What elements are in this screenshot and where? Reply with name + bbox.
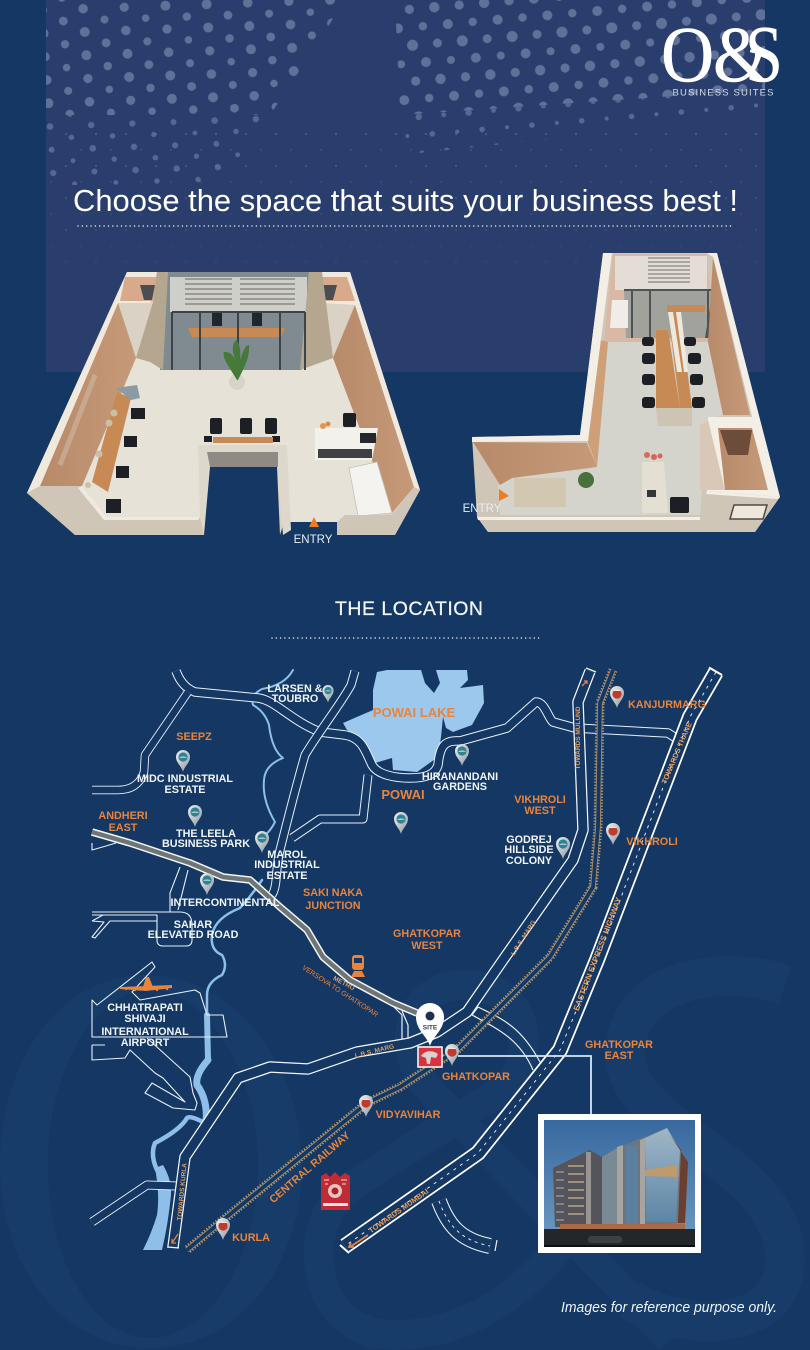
place labels: TOUBRO xyxy=(272,693,318,705)
road labels: VERSOVA TO GHATKOPAR xyxy=(300,965,379,1019)
place labels: COLONY xyxy=(506,855,553,867)
Powai lake xyxy=(343,670,484,772)
wood walls xyxy=(588,340,608,467)
place labels: SAKI NAKA xyxy=(303,887,363,899)
thin-line side roads xyxy=(92,843,227,1110)
outer shell xyxy=(472,253,780,532)
place labels: SAHAR xyxy=(174,919,212,931)
place labels: BUSINESS PARK xyxy=(162,838,250,850)
place labels: ESTATE xyxy=(164,784,206,796)
icon: metro train xyxy=(351,955,365,977)
title: Choose the space that suits your business best ! xyxy=(73,183,738,218)
place labels: VIKHROLI xyxy=(626,836,678,848)
location map xyxy=(92,668,722,1253)
place labels: ANDHERI xyxy=(98,810,148,822)
logo: O&S Business Suites: S xyxy=(745,11,783,99)
header panel with halftone dots xyxy=(46,0,765,372)
entry marker xyxy=(292,517,337,546)
corner rooms xyxy=(120,277,355,301)
outer shell xyxy=(27,272,420,535)
logo: O&S Business Suites xyxy=(661,10,783,99)
place labels: KANJURMARG xyxy=(628,699,706,711)
river xyxy=(153,670,293,1170)
meeting chairs xyxy=(204,418,280,443)
cabin glass area xyxy=(160,272,309,370)
place labels: ESTATE xyxy=(266,870,308,882)
entry marker xyxy=(463,489,509,515)
entry marker: ENTRY xyxy=(463,503,502,515)
place labels: GARDENS xyxy=(433,781,487,793)
heading: the location: THE LOCATION xyxy=(335,598,483,620)
wall caps xyxy=(472,253,612,442)
place labels: POWAI xyxy=(381,787,425,802)
small room xyxy=(707,417,780,497)
road labels: CENTRAL RAILWAY xyxy=(267,1129,353,1206)
link line to building photo xyxy=(458,1056,591,1114)
eastern express highway xyxy=(345,672,716,1246)
building photo xyxy=(538,1114,701,1253)
place labels: SHIVAJI xyxy=(124,1013,166,1025)
floor xyxy=(498,342,723,515)
icon: central railway emblem xyxy=(321,1172,350,1210)
left and right wall caps xyxy=(27,272,420,493)
place labels: AIRPORT xyxy=(121,1037,170,1049)
road labels: TOWARDS MULUND xyxy=(575,706,582,770)
place labels: WEST xyxy=(524,805,556,817)
place labels: GHATKOPAR xyxy=(442,1071,510,1083)
place labels: EAST xyxy=(109,822,138,834)
location pins xyxy=(176,685,624,1240)
place labels: GODREJ xyxy=(506,834,552,846)
plant and sofa xyxy=(578,472,594,488)
site marker: SITE xyxy=(423,1024,438,1032)
front walls xyxy=(477,491,780,532)
floor plan: large office xyxy=(27,272,420,546)
place labels: INTERCONTINENTAL xyxy=(171,897,280,909)
road labels: TOWARDS MUMBAI xyxy=(367,1187,430,1235)
place labels: HIRANANDANI xyxy=(422,771,498,783)
place labels: HILLSIDE xyxy=(504,844,554,856)
place labels: MAROL xyxy=(267,849,307,861)
place labels xyxy=(98,683,706,1244)
sofa xyxy=(349,462,392,516)
left wood wall xyxy=(40,303,136,486)
road labels: L.B.S. MARG xyxy=(510,919,538,957)
place labels: THE LEELA xyxy=(176,828,236,840)
L.B.S. Marg xyxy=(173,671,590,1247)
desk cluster xyxy=(656,330,680,408)
place labels: VIKHROLI xyxy=(514,794,566,806)
place labels: GHATKOPAR xyxy=(393,928,461,940)
metro line xyxy=(92,832,417,1013)
logo: O&S Business Suites: BUSINESS SUITES xyxy=(672,88,774,98)
icon: airplane xyxy=(120,977,172,991)
place labels: EAST xyxy=(605,1050,634,1062)
logo: O&S Business Suites: O xyxy=(661,10,714,99)
cabin desks and chairs xyxy=(188,328,285,337)
place labels: GHATKOPAR xyxy=(585,1039,653,1051)
place labels: CHHATRAPATI xyxy=(107,1002,183,1014)
road labels: TOWARDS KURLA xyxy=(177,1163,189,1221)
footnote: Images for reference purpose only. xyxy=(561,1300,777,1316)
floor plan: long office xyxy=(463,253,780,532)
central railway xyxy=(187,670,613,1250)
entry marker: ENTRY xyxy=(294,534,333,546)
front walls xyxy=(27,486,204,535)
reception desk xyxy=(315,428,378,460)
road labels: EASTERN EXPRESS HIGHWAY xyxy=(572,896,624,1012)
right wood wall xyxy=(333,305,414,513)
place labels: JUNCTION xyxy=(305,900,361,912)
place labels: ELEVATED ROAD xyxy=(148,929,239,941)
workstations left xyxy=(92,392,131,492)
cabin glass xyxy=(624,290,720,338)
site marker xyxy=(416,1003,444,1067)
logo: O&S Business Suites: & xyxy=(713,10,770,99)
place labels: VIDYAVIHAR xyxy=(376,1109,441,1121)
road labels: TOWARDS THANE xyxy=(660,721,694,785)
place labels: SEEPZ xyxy=(176,731,212,743)
road direction arrows xyxy=(172,681,587,1247)
double-line roads xyxy=(92,668,722,1253)
upper back area xyxy=(604,254,713,342)
place labels: KURLA xyxy=(232,1232,270,1244)
place labels: WEST xyxy=(411,940,443,952)
place labels: INDUSTRIAL xyxy=(254,859,320,871)
road labels: L.B.S. MARG xyxy=(354,1043,395,1060)
road labels xyxy=(177,706,694,1235)
place labels: LARSEN & xyxy=(267,683,323,695)
watermark: large faint O&S shapes xyxy=(0,975,785,1348)
road labels: METRO xyxy=(332,975,356,992)
place labels: MIDC INDUSTRIAL xyxy=(137,773,233,785)
desk and chair xyxy=(642,462,668,513)
floor xyxy=(82,358,392,522)
place labels: INTERNATIONAL xyxy=(101,1026,189,1038)
place labels: POWAI LAKE xyxy=(373,705,455,720)
U-shaped core xyxy=(198,445,291,535)
plant xyxy=(229,374,245,390)
